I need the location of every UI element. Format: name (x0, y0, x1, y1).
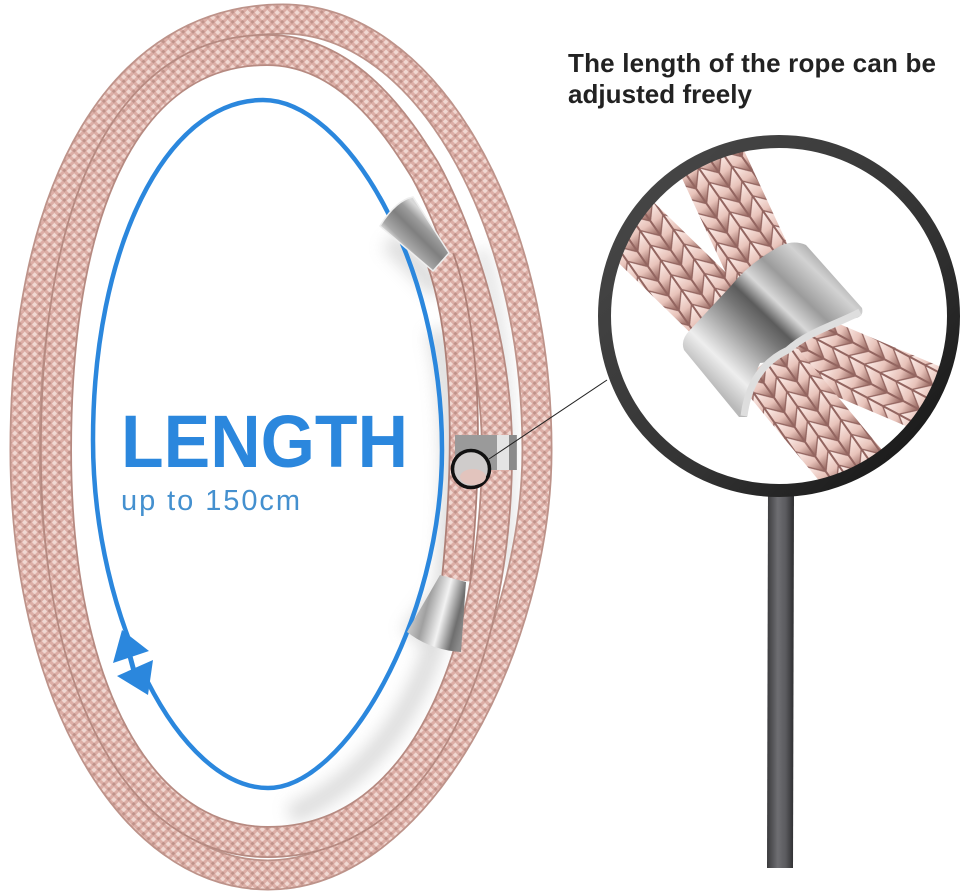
length value: up to 150cm (121, 485, 300, 517)
blue measuring loop (93, 100, 442, 788)
caption (568, 48, 936, 109)
slider clamp (455, 435, 517, 470)
LENGTH label: LENGTH (121, 400, 408, 483)
rope: short strand between cones (440, 258, 464, 580)
rope: outer loop (25, 19, 537, 875)
lens: ring (604, 142, 954, 490)
bottom metal cone (407, 575, 466, 652)
detail pointer circle (452, 380, 607, 488)
arrow marker: length ticks (110, 630, 155, 695)
magnifier lens (604, 142, 960, 495)
rope: inner loop (56, 50, 497, 842)
rope shadow (290, 240, 508, 815)
caption: adjusted freely (568, 79, 753, 109)
caption: The length of the rope can be (568, 48, 936, 78)
top metal cone (380, 197, 449, 271)
lens: rope strands (620, 152, 940, 480)
lens: metal sleeve (683, 242, 862, 417)
magnifier handle (767, 490, 794, 868)
